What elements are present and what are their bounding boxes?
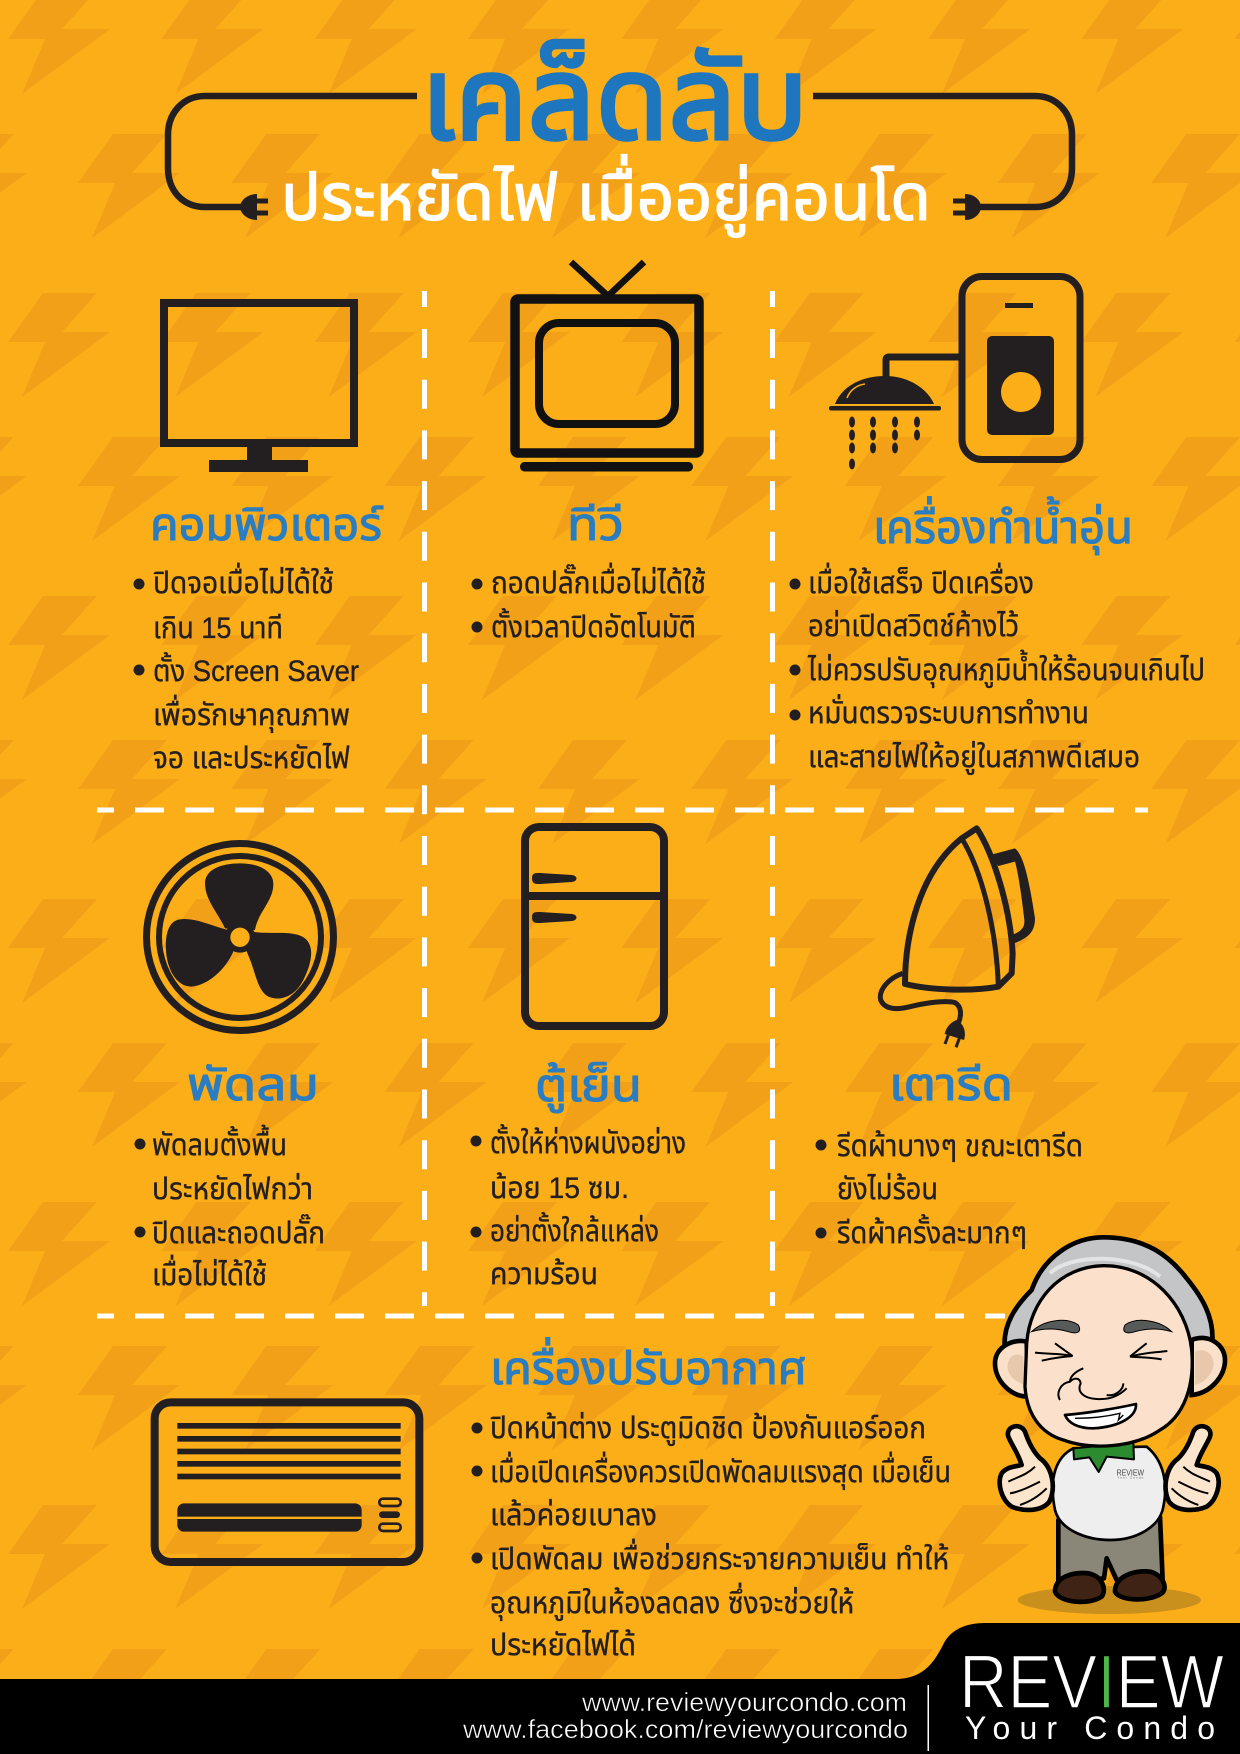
- heading: refrigerator: ตู้เย็น: [535, 1059, 642, 1113]
- text: water heater tips: และสายไฟให้อยู่ในสภาพดีเสมอ: [808, 741, 1140, 775]
- panel: refrigerator: [470, 827, 686, 1291]
- subtitle: ประหยัดไฟ เมื่ออยู่คอนโด: [281, 154, 931, 237]
- heading: water heater: เครื่องทำน้ำอุ่น: [873, 496, 1133, 555]
- text: iron tips: ยังไม่ร้อน: [837, 1173, 938, 1206]
- text: refrigerator tips: ความร้อน: [490, 1258, 598, 1291]
- panel: fan: [134, 844, 334, 1292]
- text: iron tips: รีดผ้าบางๆ ขณะเตารีด: [837, 1130, 1083, 1163]
- mascot: thumbs-up old man: REVIEW: [1117, 1467, 1144, 1477]
- text: refrigerator tips: น้อย 15 ซม.: [490, 1172, 629, 1205]
- text: iron tips: [816, 1130, 1083, 1250]
- heading: air conditioner: เครื่องปรับอากาศ: [490, 1337, 807, 1394]
- heading: iron: เตารีด: [889, 1058, 1013, 1110]
- text: iron tips: รีดผ้าครั้งละมากๆ: [837, 1214, 1027, 1250]
- heading: fan: พัดลม: [187, 1058, 319, 1110]
- icon: refrigerator: [525, 827, 664, 1026]
- text: tv tips: ตั้งเวลาปิดอัตโนมัติ: [491, 608, 696, 644]
- heading: computer: คอมพิวเตอร์: [150, 498, 383, 550]
- website link: www.reviewyourcondo.com: [581, 1687, 907, 1717]
- panel: computer: [134, 299, 383, 775]
- icon: monitor: [160, 299, 358, 472]
- text: water heater tips: [790, 562, 1205, 775]
- icon: water heater with shower: [829, 276, 1080, 470]
- text: tv tips: [472, 562, 706, 644]
- text: fan tips: เมื่อไม่ได้ใช้: [152, 1254, 267, 1292]
- text: water heater tips: หมั่นตรวจระบบการทำงาน: [808, 694, 1089, 730]
- text: fan tips: ปิดและถอดปลั๊ก: [152, 1214, 325, 1250]
- text: computer tips: เกิน 15 นาที: [153, 612, 283, 645]
- panel: tv: [472, 262, 706, 644]
- text: refrigerator tips: ตั้งให้ห่างผนังอย่าง: [490, 1124, 686, 1160]
- text: water heater tips: ไม่ควรปรับอุณหภูมิน้ำให้ร้อนจนเกินไป: [807, 649, 1205, 688]
- text: air conditioner tips: ปิดหน้าต่าง ประตูมิดชิด ป้องกันแอร์ออก: [490, 1412, 926, 1446]
- icon: power cord right: [813, 96, 1072, 220]
- text: computer tips: เพื่อรักษาคุณภาพ: [153, 694, 350, 733]
- logo: review your condo: REVIEW: [959, 1640, 1224, 1725]
- title: เคล็ดลับ: [421, 34, 808, 164]
- text: water heater tips: อย่าเปิดสวิตช์ค้างไว้: [808, 610, 1019, 643]
- heading: tv: ทีวี: [567, 498, 624, 550]
- text: fan tips: พัดลมตั้งพื้น: [152, 1124, 287, 1162]
- icon: air conditioner: [155, 1402, 419, 1562]
- panel: iron: [816, 828, 1083, 1250]
- text: computer tips: [134, 562, 359, 775]
- text: computer tips: ตั้ง Screen Saver: [153, 652, 359, 688]
- icon: television: [515, 262, 699, 472]
- icon: iron: [880, 828, 1035, 1047]
- text: tv tips: ถอดปลั๊กเมื่อไม่ได้ใช้: [491, 562, 706, 600]
- icon: fan: [146, 844, 334, 1030]
- text: air conditioner tips: ประหยัดไฟได้: [490, 1629, 636, 1662]
- logo: review your condo: Your Condo: [965, 1710, 1215, 1746]
- icon: power cord left: [168, 96, 417, 220]
- text: air conditioner tips: แล้วค่อยเบาลง: [490, 1499, 657, 1532]
- text: air conditioner tips: เมื่อเปิดเครื่องควรเปิดพัดลมแรงสุด เมื่อเย็น: [490, 1451, 951, 1490]
- text: fan tips: [134, 1124, 325, 1292]
- text: computer tips: ปิดจอเมื่อไม่ได้ใช้: [153, 562, 334, 600]
- mascot: thumbs-up old man: Your Condo: [1117, 1475, 1144, 1479]
- text: computer tips: จอ และประหยัดไฟ: [153, 742, 350, 775]
- footer: black brand bar: [0, 1623, 1240, 1754]
- header: title with power cord: [168, 34, 1072, 237]
- text: refrigerator tips: [470, 1124, 686, 1291]
- text: air conditioner tips: อุณหภูมิในห้องลดลง ซึ่งจะช่วยให้: [490, 1582, 854, 1621]
- text: refrigerator tips: อย่าตั้งใกล้แหล่ง: [490, 1212, 659, 1248]
- text: air conditioner tips: [472, 1412, 951, 1662]
- text: air conditioner tips: เปิดพัดลม เพื่อช่วยกระจายความเย็น ทำให้: [490, 1538, 949, 1576]
- text: water heater tips: เมื่อใช้เสร็จ ปิดเครื่อง: [808, 562, 1034, 600]
- facebook link: www.facebook.com/reviewyourcondo: [462, 1714, 908, 1744]
- text: fan tips: ประหยัดไฟกว่า: [152, 1173, 313, 1206]
- panel: air conditioner: [155, 1337, 951, 1662]
- panel: water heater: [790, 276, 1205, 775]
- mascot: thumbs-up old man: [995, 1237, 1225, 1614]
